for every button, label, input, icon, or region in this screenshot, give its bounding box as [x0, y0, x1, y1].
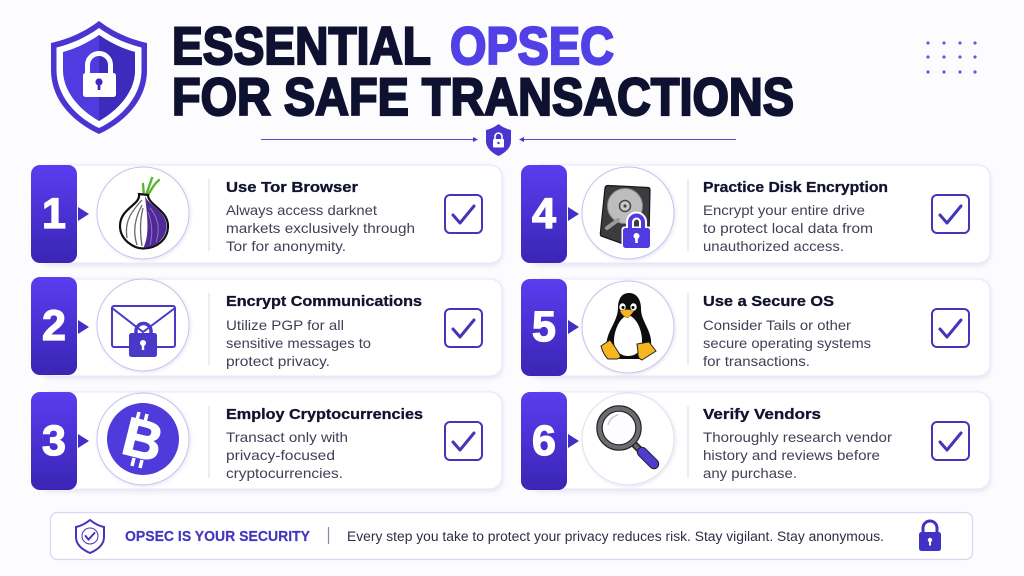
icon: checkbox	[932, 309, 969, 347]
icon: checkbox	[445, 195, 482, 233]
number badge 3: 3	[42, 417, 66, 465]
text: Employ Cryptocurrencies: Employ Cryptocurrencies	[226, 406, 423, 423]
panel: step 3 Employ Cryptocurrencies	[31, 392, 502, 490]
text: Use Tor Browser	[226, 179, 415, 254]
text: Use Tor Browser: Tor for anonymity.	[226, 238, 346, 254]
icon: magnifying glass	[582, 393, 674, 485]
text: Verify Vendors: any purchase.	[703, 465, 797, 481]
number badge 2: 2	[42, 302, 66, 350]
title	[172, 17, 794, 127]
panel: step 2 Encrypt Communications	[31, 277, 502, 376]
panel: step 1 Use Tor Browser	[31, 165, 502, 263]
text: Practice Disk Encryption: to protect local data from	[703, 220, 873, 236]
icon: Linux penguin	[582, 281, 674, 373]
number badge 6: 6	[532, 417, 556, 465]
panel: step 6 Verify Vendors	[521, 392, 990, 490]
number badge 1: 1	[42, 190, 66, 238]
text: Use a Secure OS: secure operating systems	[703, 335, 871, 351]
icon: shield with check	[76, 520, 104, 553]
text: Use a Secure OS: for transactions.	[703, 353, 810, 369]
number badge 5	[521, 279, 579, 376]
text: Use a Secure OS	[703, 293, 871, 369]
panel: step 4 Practice Disk Encryption	[521, 165, 990, 263]
text: Use Tor Browser: markets exclusively through	[226, 220, 415, 236]
icon: bitcoin coin: B	[117, 406, 169, 474]
text: Employ Cryptocurrencies	[226, 406, 423, 481]
icon: Tor onion	[97, 167, 189, 259]
text: Use Tor Browser: Use Tor Browser	[226, 179, 358, 196]
text: Encrypt Communications	[226, 293, 422, 369]
banner heading: OPSEC IS YOUR SECURITY	[125, 529, 310, 545]
text: Employ Cryptocurrencies: Transact only with	[226, 429, 348, 445]
text: Encrypt Communications: protect privacy.	[226, 353, 330, 369]
title divider with small shield	[261, 124, 736, 156]
icon: padlock	[919, 521, 941, 551]
number badge 5: 5	[532, 303, 556, 351]
icon: hard disk with lock	[582, 167, 674, 259]
panel: bottom banner	[50, 512, 972, 560]
number badge 4	[521, 165, 579, 263]
number badge 2	[31, 277, 89, 375]
text: Employ Cryptocurrencies: privacy-focused	[226, 447, 335, 463]
icon: checkbox	[932, 422, 969, 460]
panel: step 5 Use a Secure OS	[521, 279, 990, 376]
text: Verify Vendors	[703, 406, 892, 481]
banner message: Every step you take to protect your privacy reduces risk. Stay vigilant. Stay anonymous.	[347, 529, 884, 544]
text: Encrypt Communications: Encrypt Communications	[226, 293, 422, 310]
icon: large shield with padlock	[51, 21, 147, 134]
icon: bitcoin coin	[97, 393, 189, 485]
text: Use Tor Browser: Always access darknet	[226, 202, 377, 218]
number badge 1	[31, 165, 89, 263]
text: Encrypt Communications: Utilize PGP for all	[226, 317, 344, 333]
number badge 4: 4	[532, 190, 556, 238]
icon: checkbox	[445, 309, 482, 347]
number badge 3	[31, 392, 89, 490]
decorative dot grid	[926, 41, 977, 74]
icon: checkbox	[445, 422, 482, 460]
icon: envelope with lock	[97, 279, 189, 371]
text: Verify Vendors: Verify Vendors	[703, 406, 821, 423]
text: Use a Secure OS: Consider Tails or other	[703, 317, 851, 333]
title: FOR SAFE TRANSACTIONS	[172, 68, 794, 127]
text: Practice Disk Encryption: Encrypt your entire drive	[703, 202, 865, 218]
number badge 6	[521, 392, 579, 490]
text: Use a Secure OS: Use a Secure OS	[703, 293, 834, 310]
text: Practice Disk Encryption: Practice Disk Encryption	[703, 179, 888, 196]
title: ESSENTIAL	[172, 17, 431, 76]
text: Practice Disk Encryption	[703, 179, 888, 254]
text: Employ Cryptocurrencies: cryptocurrencies.	[226, 465, 343, 481]
text: Practice Disk Encryption: unauthorized access.	[703, 238, 844, 254]
title: OPSEC	[450, 17, 614, 76]
text: Encrypt Communications: sensitive messages to	[226, 335, 371, 351]
text: Verify Vendors: history and reviews before	[703, 447, 880, 463]
text: Verify Vendors: Thoroughly research vendor	[703, 429, 892, 445]
icon: checkbox	[932, 195, 969, 233]
